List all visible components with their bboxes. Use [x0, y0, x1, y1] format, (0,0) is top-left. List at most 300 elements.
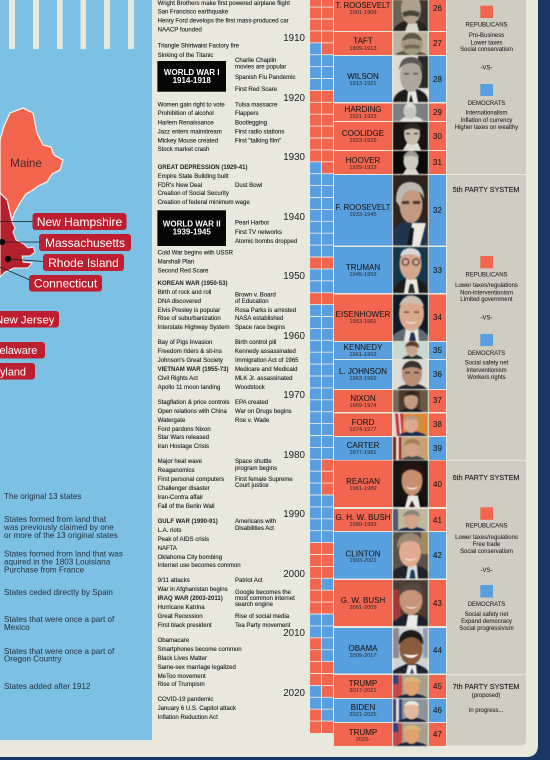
president: Trump (47): 2025-	[356, 737, 370, 743]
event list 1920s: Tulsa massacre	[235, 102, 278, 108]
event list 1960s: Woodstock	[235, 385, 266, 391]
event list 2020s	[158, 697, 237, 721]
event list 1910s: First Red Scare	[235, 87, 278, 93]
event list 1930s: Dust Bowl	[235, 183, 262, 189]
event list 1980s: Reaganomics	[158, 468, 195, 474]
year 2020: 2020	[283, 688, 306, 699]
map legend text: The original 13 states	[4, 492, 81, 501]
6th party system notes: -VS-	[481, 568, 492, 574]
label: Massachusetts: Massachusetts	[45, 236, 125, 250]
event list 1920s: First radio stations	[235, 129, 284, 135]
4th party system notes	[455, 6, 518, 131]
portrait: Obama	[392, 627, 429, 674]
president: Truman	[334, 247, 446, 293]
label: Delaware	[0, 342, 45, 358]
label: New Hampshire: New Hampshire	[37, 215, 123, 229]
4th party system notes: Lower taxes	[470, 40, 503, 46]
event list 1970s: Star Wars released	[158, 435, 209, 441]
president: Reagan	[334, 460, 446, 507]
president: L. Johnson	[334, 360, 446, 389]
6th party system notes: Social safety net	[465, 612, 509, 618]
event list 2020s: COVID-19 pandemic	[158, 697, 213, 703]
president: Coolidge	[334, 122, 446, 150]
event list 2020s: January 6 U.S. Capitol attack	[158, 706, 237, 712]
5th party system notes: Non-interventionism	[460, 290, 513, 296]
president: Hoover: 31	[433, 158, 442, 167]
event list 2000s: Hurricane Katrina	[158, 605, 205, 611]
year 1980: 1980	[283, 450, 306, 461]
president: Taft: TAFT	[353, 37, 373, 46]
president: Ford: FORD	[352, 418, 375, 427]
president: Wilson: WILSON	[347, 72, 379, 81]
event list 1930s: Creation of federal minimum wage	[158, 200, 250, 206]
7th party system notes	[453, 682, 519, 714]
president: Obama: 44	[433, 646, 442, 655]
event list 1950s: NASA established	[235, 316, 283, 322]
event list 2010s: Obamacare	[158, 638, 190, 644]
event list 2000s: War in Afghanistan begins	[158, 587, 228, 593]
6th party system notes: DEMOCRATS	[468, 602, 505, 608]
connector dots	[0, 239, 11, 262]
grid column: left chamber	[310, 0, 321, 733]
map legend text: States formed from land that was	[4, 550, 123, 558]
president: Trump (47): TRUMP	[349, 728, 377, 737]
5th party system notes: DEMOCRATS	[468, 351, 505, 357]
event list 1960s: VIETNAM WAR (1955-73)	[158, 367, 229, 373]
event list 1990s: Disabilities Act	[235, 526, 274, 532]
portrait: L. Johnson	[393, 360, 428, 390]
event list 2010s: Smartphones become common	[158, 647, 242, 653]
event list 1940s: Cold War begins with USSR	[158, 251, 234, 257]
portrait: G. W. Bush	[392, 579, 429, 627]
president: G. W. Bush: G. W. BUSH	[341, 596, 385, 605]
president: G. H. W. Bush: 1989-1993	[349, 522, 377, 528]
event list 1990s: Oklahoma City bombing	[158, 555, 222, 561]
event list 1980s: First female Supreme	[235, 477, 293, 483]
president: Clinton: 42	[433, 551, 442, 560]
event list 1940s: Pearl Harbor	[235, 221, 269, 227]
year 1920: 1920	[283, 93, 306, 104]
6th party system notes	[453, 473, 519, 632]
portrait: Biden	[392, 698, 428, 723]
5th party system notes	[453, 185, 519, 381]
party system dividers	[447, 174, 526, 675]
5th party system notes: Interventionism	[466, 368, 507, 374]
president: Eisenhower: EISENHOWER	[336, 310, 391, 319]
event list 1940s: Second Red Scare	[158, 269, 209, 275]
event list 1920s: First "talking film"	[235, 138, 281, 144]
portrait: Kennedy	[392, 340, 428, 360]
label: New Jersey	[0, 311, 59, 328]
president: Hoover: 1929-1933	[349, 165, 377, 171]
4th party system notes: Pro-Business	[469, 33, 504, 39]
4th party system notes: Inflation of currency	[461, 118, 512, 124]
president: Biden: 46	[433, 706, 442, 715]
event list 2000s: Rise of social media	[235, 614, 290, 620]
event list 2000s: most common internet	[235, 596, 295, 602]
event list 1990s: Peak of AIDS crisis	[158, 537, 209, 543]
event list 1970s: EPA created	[235, 400, 268, 406]
president: Taft	[334, 32, 446, 55]
event list 2010s: MeToo movement	[158, 674, 206, 680]
portrait: Harding	[392, 102, 429, 122]
7th party system notes: (proposed)	[472, 693, 500, 699]
president: Trump (45): TRUMP	[349, 679, 377, 688]
event list 1960s: MLK Jr. assassinated	[235, 376, 292, 382]
year 1960: 1960	[283, 331, 306, 342]
president: Trump (45)	[334, 675, 446, 698]
president: F. Roosevelt: 32	[433, 206, 442, 215]
5th party system notes: REPUBLICANS	[466, 273, 507, 279]
event list 1930s: Creation of Social Security	[158, 191, 230, 197]
states: New England original colonies	[0, 193, 35, 277]
event list 1990s	[158, 519, 276, 569]
event list 1900s	[158, 1, 290, 34]
president: Harding: HARDING	[345, 105, 381, 114]
event list 1990s: Americans with	[235, 519, 276, 525]
event list 1900s: NAACP founded	[158, 28, 202, 34]
portrait: Reagan	[392, 460, 429, 508]
event list 1960s: Birth control pill	[235, 340, 276, 346]
president: Harding: 1921-1923	[349, 114, 377, 120]
president: F. Roosevelt	[334, 175, 446, 246]
president: Obama	[334, 628, 446, 674]
4th party system notes: Internationalism	[466, 110, 508, 116]
event list 1910s: Triangle Shirtwaist Factory fire	[158, 44, 240, 50]
event list 1950s	[158, 281, 296, 331]
event list 2000s: search engine	[235, 602, 274, 608]
label text: Maine: Maine	[10, 157, 42, 170]
7th party system notes: In progress...	[469, 708, 504, 714]
panel: timeline events	[157, 1, 306, 721]
event list 1980s: Challenger disaster	[158, 486, 210, 492]
portrait: Taft	[392, 32, 428, 56]
president: Biden	[334, 699, 446, 722]
map legend text: States formed from land that	[4, 515, 107, 524]
event list 1980s: Space shuttle	[235, 459, 272, 465]
event list 1910s: Charlie Chaplin	[235, 58, 276, 64]
president: Eisenhower: 1953-1961	[349, 319, 377, 325]
president: Wilson: 28	[433, 75, 442, 84]
6th party system notes: Social conservatism	[460, 549, 513, 555]
event list 1970s: Ford pardons Nixon	[158, 427, 211, 433]
6th party system notes: Expand democracy	[461, 619, 512, 625]
president: Carter: 39	[433, 444, 442, 453]
event list 1940s: Atomic bombs dropped	[235, 239, 297, 245]
president: Reagan: 1981-1989	[349, 486, 377, 492]
president: Coolidge: 30	[433, 132, 442, 141]
5th party system notes: Limited government	[460, 297, 513, 303]
portrait: Trump (47)	[392, 722, 428, 747]
map legend text: aquired in the 1803 Louisiana	[4, 558, 111, 566]
portrait: Ford	[393, 412, 429, 437]
president: Kennedy	[334, 341, 446, 359]
portrait: Wilson	[392, 55, 429, 103]
event list 2000s: Google becomes the	[235, 590, 291, 596]
president: Ford: 1974-1977	[349, 427, 377, 433]
president: Truman: 1945-1953	[349, 272, 377, 278]
panel: presidents column	[334, 0, 446, 746]
president: Ford: 38	[433, 420, 442, 429]
year 1970: 1970	[283, 390, 306, 401]
president: Clinton	[334, 532, 446, 578]
flag stripes	[9, 0, 134, 49]
president: Wilson: 1913-1921	[349, 81, 377, 87]
president: F. Roosevelt: F. ROOSEVELT	[336, 203, 391, 212]
4th party system notes: Social conservatism	[460, 47, 513, 53]
president: G. H. W. Bush	[334, 509, 446, 531]
panel: party systems	[447, 0, 526, 746]
president: L. Johnson: L. JOHNSON	[339, 367, 387, 376]
5th party system notes: Lower taxes/regulations	[455, 283, 518, 289]
president: G. H. W. Bush: 41	[433, 516, 442, 525]
president: Wilson	[334, 56, 446, 102]
event list 1900s: Henry Ford develops the first mass-produced car	[158, 19, 289, 25]
event list 1960s: Apollo 11 moon landing	[158, 385, 220, 391]
event list 1920s: Flappers	[235, 111, 259, 117]
chart: congress control grid	[310, 0, 333, 733]
event list 1970s: Roe v. Wade	[235, 418, 270, 424]
portrait: Trump (45)	[392, 674, 428, 699]
event list 1960s: Bay of Pigs Invasion	[158, 340, 212, 346]
event list 1910s	[158, 44, 296, 93]
event list 1920s: Bootlegging	[235, 120, 267, 126]
president: Trump (45): 45	[433, 682, 442, 691]
president: Coolidge: 1923-1929	[349, 138, 377, 144]
event list 1960s: Kennedy assassinated	[235, 349, 296, 355]
president: Eisenhower: 34	[433, 313, 442, 322]
box: World War I	[157, 61, 226, 92]
event list 1950s: of Education	[235, 299, 269, 305]
event list 1970s	[158, 400, 292, 450]
president: Nixon: 37	[433, 396, 442, 405]
president: Carter: CARTER	[347, 441, 380, 450]
president: Taft: 1909-1913	[349, 46, 377, 52]
event list 1960s	[158, 340, 299, 391]
party panel background	[447, 0, 526, 746]
map legend text: was previously claimed by one	[3, 523, 114, 532]
event list 1970s: Watergate	[158, 418, 186, 424]
box: World War I: 1914-1918	[173, 76, 211, 85]
6th party system notes: Free trade	[473, 542, 501, 548]
event list 1930s: FDR's New Deal	[158, 183, 202, 189]
event list 1980s: Iran-Contra affair	[158, 495, 203, 501]
year 2010: 2010	[283, 628, 306, 639]
president: Reagan: REAGAN	[346, 477, 380, 486]
president: Nixon: 1969-1974	[349, 403, 377, 409]
event list 1990s: Internet use becomes common	[158, 563, 241, 569]
year 2000: 2000	[283, 569, 306, 580]
map legend text: States ceded directly by Spain	[4, 588, 113, 597]
event list 1970s: War on Drugs begins	[235, 409, 292, 415]
event list 1940s: Marshall Plan	[158, 260, 194, 266]
year 1910: 1910	[283, 33, 306, 44]
president: T. Roosevelt: 1901-1909	[349, 10, 377, 16]
event list 2000s	[158, 578, 295, 629]
map legend text: States that were once a part of	[4, 647, 115, 656]
event list 1970s: Iran Hostage Crisis	[158, 444, 209, 450]
6th party system notes: Lower taxes/regulations	[455, 535, 518, 541]
event list 1950s: Rise of suburbanization	[158, 316, 221, 322]
president: G. H. W. Bush: G. H. W. BUSH	[336, 513, 391, 522]
president: Truman: 33	[433, 266, 442, 275]
grid column: right chamber	[322, 0, 333, 733]
map legend text: Oregon Country	[4, 654, 63, 664]
event list 1930s	[158, 165, 262, 206]
year 1940: 1940	[283, 212, 306, 223]
5th party system notes: 5th PARTY SYSTEM	[453, 185, 519, 194]
event list 1920s: Jazz enters mainstream	[158, 129, 222, 135]
6th party system notes: 6th PARTY SYSTEM	[453, 473, 519, 482]
map legend text: States that were once a part of	[4, 615, 115, 624]
event list 2000s: Patriot Act	[235, 578, 263, 584]
president: Harding	[334, 103, 446, 121]
event list 1950s: Space race begins	[235, 325, 285, 331]
president: G. W. Bush: 2001-2009	[349, 605, 377, 611]
event list 1900s: San Francisco earthquake	[158, 10, 229, 16]
event list 1930s: GREAT DEPRESSION (1929-41)	[158, 165, 248, 171]
event list 1920s: Harlem Renaissance	[158, 120, 214, 126]
4th party system notes: Higher taxes on wealthy	[455, 125, 518, 131]
president: Kennedy: 1961-1963	[349, 352, 377, 358]
event list 1990s: NAFTA	[158, 546, 178, 552]
event list 1950s: Elvis Presley is popular	[158, 308, 220, 314]
map legend text: States added after 1912	[4, 682, 91, 691]
portrait: Carter	[392, 436, 429, 460]
president: T. Roosevelt	[334, 0, 446, 31]
connector lines	[0, 222, 44, 280]
event list 2000s: IRAQ WAR (2003-2011)	[158, 596, 223, 602]
event list 1970s: Stagflation & price controls	[158, 400, 230, 406]
event list 1950s: KOREAN WAR (1950-53)	[158, 281, 227, 287]
event list 2010s	[158, 638, 242, 688]
president: L. Johnson: 36	[433, 370, 442, 379]
box: World War II: 1939-1945	[173, 228, 211, 236]
label: Rhode Island: Rhode Island	[48, 256, 119, 270]
president: Ford	[334, 414, 446, 436]
event list 1950s: Rosa Parks is arrested	[235, 308, 296, 314]
president: Nixon: NIXON	[350, 394, 376, 403]
event list 2010s: Rise of Trumpism	[158, 682, 205, 688]
event list 1960s: Freedom riders & sit-ins	[158, 349, 222, 355]
president: Biden: 2021-2025	[349, 712, 377, 718]
event list 1960s: Johnson's Great Society	[158, 358, 224, 364]
event list 1920s: Mickey Mouse created	[158, 138, 218, 144]
president: T. Roosevelt: 26	[433, 4, 442, 13]
state: Maine	[0, 108, 63, 220]
map legend text: Mexico	[4, 623, 30, 632]
president: Clinton: CLINTON	[346, 549, 381, 558]
5th party system notes: Workers rights	[467, 375, 506, 381]
map legend text: Purchase from France	[4, 566, 85, 574]
president: Harding: 29	[433, 108, 442, 117]
president: Obama: OBAMA	[349, 644, 378, 653]
event list 1950s: Brown v. Board	[235, 293, 276, 299]
4th party system notes: DEMOCRATS	[468, 101, 505, 107]
president: Carter	[334, 437, 446, 460]
event list 1960s: Civil Rights Act	[158, 376, 198, 382]
event list 2020s: Inflation Reduction Act	[158, 715, 218, 721]
5th party system notes: Social safety net	[465, 360, 509, 366]
portrait: Truman	[392, 246, 429, 294]
label: Connecticut: Connecticut	[34, 276, 98, 290]
president: Trump (47)	[334, 723, 446, 746]
event list 1920s: Prohibition of alcohol	[158, 111, 214, 117]
event list 1920s	[158, 102, 284, 153]
president: F. Roosevelt: 1933-1945	[349, 212, 377, 218]
president: Eisenhower	[334, 294, 446, 341]
4th party system notes: REPUBLICANS	[466, 23, 507, 29]
event list 1990s: L.A. riots	[158, 528, 181, 534]
event list 1980s: First personal computers	[158, 477, 224, 483]
event list 1950s: DNA discovered	[158, 299, 201, 305]
president: Carter: 1977-1981	[349, 450, 377, 456]
event list 1970s: Open relations with China	[158, 409, 227, 415]
event list 2000s: Great Recession	[158, 614, 203, 620]
event list 1910s: movies are popular	[235, 64, 286, 70]
president: L. Johnson: 1963-1969	[349, 376, 377, 382]
event list 2000s: First black president	[158, 623, 212, 629]
event list 2000s: Tea Party movement	[235, 623, 291, 629]
event list 1920s: Stock market crash	[158, 147, 209, 153]
event list 1980s: Court justice	[235, 483, 269, 489]
president: Clinton: 1993-2001	[349, 558, 377, 564]
portrait: G. H. W. Bush	[392, 508, 428, 532]
panel: map of states	[0, 0, 152, 740]
event list 2000s: 9/11 attacks	[158, 578, 190, 584]
president: Nixon	[334, 390, 446, 412]
president: Coolidge: COOLIDGE	[342, 129, 384, 138]
year 1990: 1990	[283, 509, 306, 520]
event list 1980s: program begins	[235, 466, 277, 472]
event list 2010s: Same-sex marriage legalized	[158, 665, 236, 671]
president: Hoover	[334, 151, 446, 174]
event list 1900s: Wright Brothers make first powered airplane flight	[158, 1, 290, 7]
event list 1940s: First TV networks	[235, 230, 282, 236]
year 1950: 1950	[283, 271, 306, 282]
event list 1920s: Women gain right to vote	[158, 102, 225, 108]
event list 1940s	[158, 221, 297, 275]
4th party system notes: -VS-	[481, 66, 492, 72]
event list 1960s: Medicare and Medicaid	[235, 367, 298, 373]
portrait: Hoover	[392, 150, 429, 175]
event list 1960s: Immigration Act of 1965	[235, 358, 299, 364]
5th party system notes: -VS-	[481, 316, 492, 322]
event list 1950s: Interstate Highway System	[158, 325, 230, 331]
portrait: Eisenhower	[392, 294, 429, 342]
event list 1980s: Fall of the Berlin Wall	[158, 504, 215, 510]
portrait: Nixon	[392, 389, 429, 413]
event list 1910s: Spanish Flu Pandemic	[235, 75, 296, 81]
event list 1950s: Birth of rock and roll	[158, 290, 211, 296]
president: Truman: TRUMAN	[346, 263, 380, 272]
map water background	[0, 0, 152, 740]
portrait: F. Roosevelt	[392, 174, 429, 246]
president: Trump (47): 47	[433, 730, 442, 739]
president: Obama: 2009-2017	[349, 653, 377, 659]
6th party system notes: Social progressivism	[459, 626, 514, 632]
president: G. W. Bush: 43	[433, 599, 442, 608]
portrait: Clinton	[392, 531, 429, 580]
event list 1980s	[158, 459, 293, 510]
president: Biden: BIDEN	[351, 703, 375, 712]
map legend text	[3, 492, 123, 691]
map legend text: or more of the 13 original states	[4, 531, 118, 540]
president: Kennedy: KENNEDY	[344, 343, 383, 352]
president: T. Roosevelt: T. ROOSEVELT	[336, 1, 391, 10]
label: Maryland	[0, 363, 35, 380]
6th party system notes: REPUBLICANS	[466, 524, 507, 530]
